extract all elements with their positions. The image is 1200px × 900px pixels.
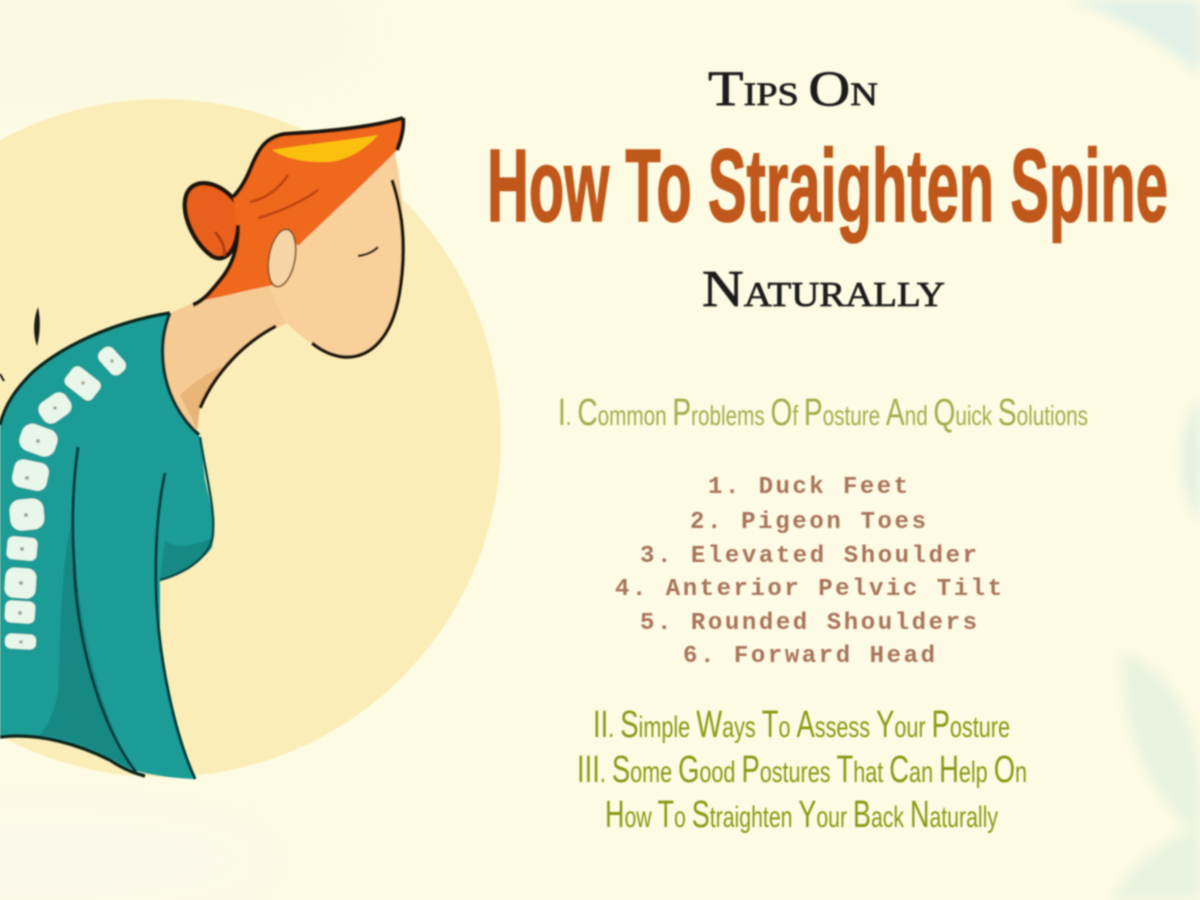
hair bun [185,183,239,258]
heading: tips on: TIPS ON [708,60,878,116]
background circle [0,99,501,777]
hair [193,118,404,305]
hair highlight [272,135,378,162]
sections II and III [577,704,1027,836]
item 4: 4. Anterior Pelvic Tilt [615,576,1002,603]
shirt outlines [0,313,170,425]
section III heading line 2: How To Straighten Your Back Naturally [605,794,998,836]
list of posture problems [615,474,1002,670]
eye [358,247,378,256]
neck [163,282,292,432]
item 6: 6. Forward Head [683,643,935,670]
item 1: 1. Duck Feet [708,474,908,501]
heading: naturally: NATURALLY [702,261,945,318]
spine vertebrae [4,344,129,650]
item 3: 3. Elevated Shoulder [640,543,977,570]
face [261,150,403,357]
section III heading line 1: III. Some Good Postures That Can Help On [577,749,1027,791]
section II heading: II. Simple Ways To Assess Your Posture [593,704,1010,746]
shirt [0,313,214,779]
section I heading: I. Common Problems Of Posture And Quick Solutions [558,392,1088,434]
decorative leaves [1065,0,1200,900]
item 5: 5. Rounded Shoulders [640,610,977,637]
icon: motion marks [0,307,40,381]
ear [264,227,300,289]
item 2: 2. Pigeon Toes [690,509,926,536]
illustration: woman with curved spine [0,118,404,779]
